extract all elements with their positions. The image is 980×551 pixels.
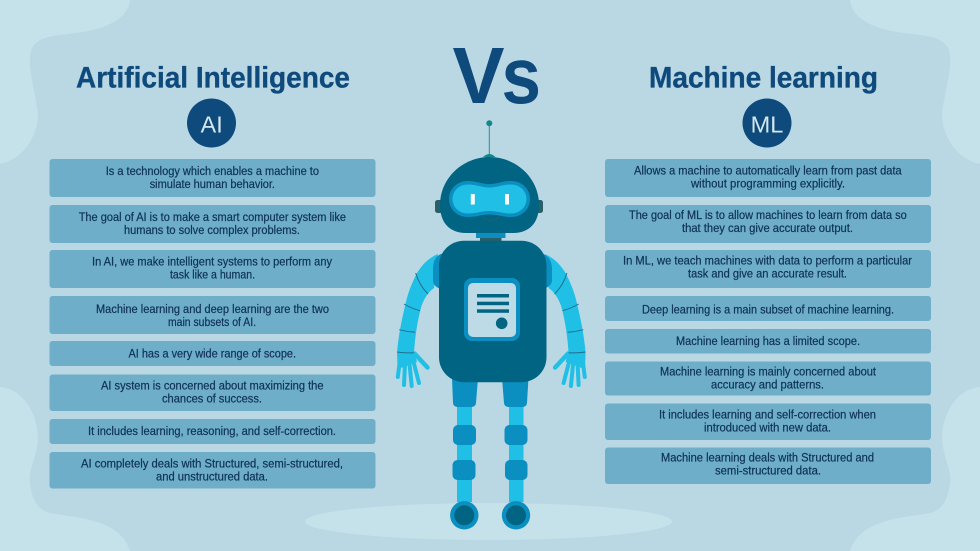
ML row 5: Machine learning has a limited scope. [676, 334, 860, 348]
ML row 2: The goal of ML is to allow machines to learn from data so [629, 208, 907, 222]
AI row 2: humans to solve complex problems. [124, 223, 300, 237]
AI row 6 [50, 374, 376, 411]
ML row 8 [605, 448, 931, 484]
illustration: robot [397, 120, 586, 530]
ML row 4: Deep learning is a main subset of machine learning. [642, 302, 894, 316]
ML row 6 [605, 362, 931, 396]
robot torso [439, 241, 546, 382]
robot left arm [397, 254, 438, 386]
ML row 7: It includes learning and self-correction when [659, 408, 876, 422]
ML row 6: Machine learning is mainly concerned about [660, 364, 877, 378]
robot shoulders [433, 253, 552, 290]
heading: Vs: V [452, 31, 504, 120]
heading: Vs: s [502, 31, 541, 120]
AI row 3 [50, 250, 376, 288]
AI row 7: It includes learning, reasoning, and self-correction. [88, 424, 336, 438]
AI row 1 [50, 159, 376, 197]
ML row 1 [605, 159, 931, 197]
badge: AI: AI [201, 112, 223, 138]
badge: ML: ML [751, 112, 784, 138]
robot chest panel [464, 278, 520, 341]
AI row 1: simulate human behavior. [150, 177, 275, 191]
robot head [440, 157, 539, 233]
heading: Machine learning: Machine learning [649, 62, 878, 94]
ML row 1: without programming explicitly. [690, 176, 845, 190]
AI row 6: AI system is concerned about maximizing the [101, 378, 324, 392]
ML row 4 [605, 296, 931, 321]
AI row 7 [50, 419, 376, 444]
robot ears [435, 200, 543, 213]
AI row 2: The goal of AI is to make a smart computer system like [79, 210, 346, 224]
ML row 1: Allows a machine to automatically learn from past data [634, 164, 902, 178]
AI row 5 [50, 341, 376, 366]
ML row 6: accuracy and patterns. [711, 378, 824, 392]
ML row 2 [605, 205, 931, 243]
ML row 8: semi-structured data. [715, 464, 821, 478]
robot right arm [545, 254, 586, 386]
ML row 7 [605, 404, 931, 440]
badge: AI [187, 98, 236, 148]
robot legs [450, 378, 530, 530]
AI row 1: Is a technology which enables a machine to [106, 164, 319, 178]
ML row 3 [605, 250, 931, 288]
AI row 4 [50, 296, 376, 334]
robot neck [476, 232, 506, 242]
ML row 7: introduced with new data. [704, 420, 831, 434]
heading: Vs [452, 31, 541, 120]
ML row 3: task and give an accurate result. [688, 266, 847, 280]
AI row 6: chances of success. [162, 392, 262, 406]
AI row 8: and unstructured data. [156, 470, 268, 484]
ML row 5 [605, 329, 931, 354]
ML row 8: Machine learning deals with Structured and [661, 450, 874, 464]
AI row 3: In AI, we make intelligent systems to perform any [92, 254, 333, 268]
badge: ML [742, 98, 792, 148]
AI row 4: Machine learning and deep learning are the two [96, 302, 329, 316]
ML row 2: that they can give accurate output. [682, 221, 853, 235]
panel: AI characteristics [50, 159, 376, 488]
AI row 8 [50, 452, 376, 488]
AI row 5: AI has a very wide range of scope. [128, 346, 296, 360]
robot visor [449, 181, 530, 220]
AI row 2 [50, 205, 376, 243]
AI row 4: main subsets of AI. [168, 315, 256, 329]
AI row 8: AI completely deals with Structured, semi-structured, [81, 456, 343, 470]
ML row 3: In ML, we teach machines with data to perform a particular [623, 254, 912, 268]
heading: Artificial Intelligence: Artificial Intelligence [76, 62, 350, 94]
panel: ML characteristics [605, 159, 931, 484]
robot antenna [483, 120, 496, 157]
AI row 3: task like a human. [170, 268, 255, 282]
